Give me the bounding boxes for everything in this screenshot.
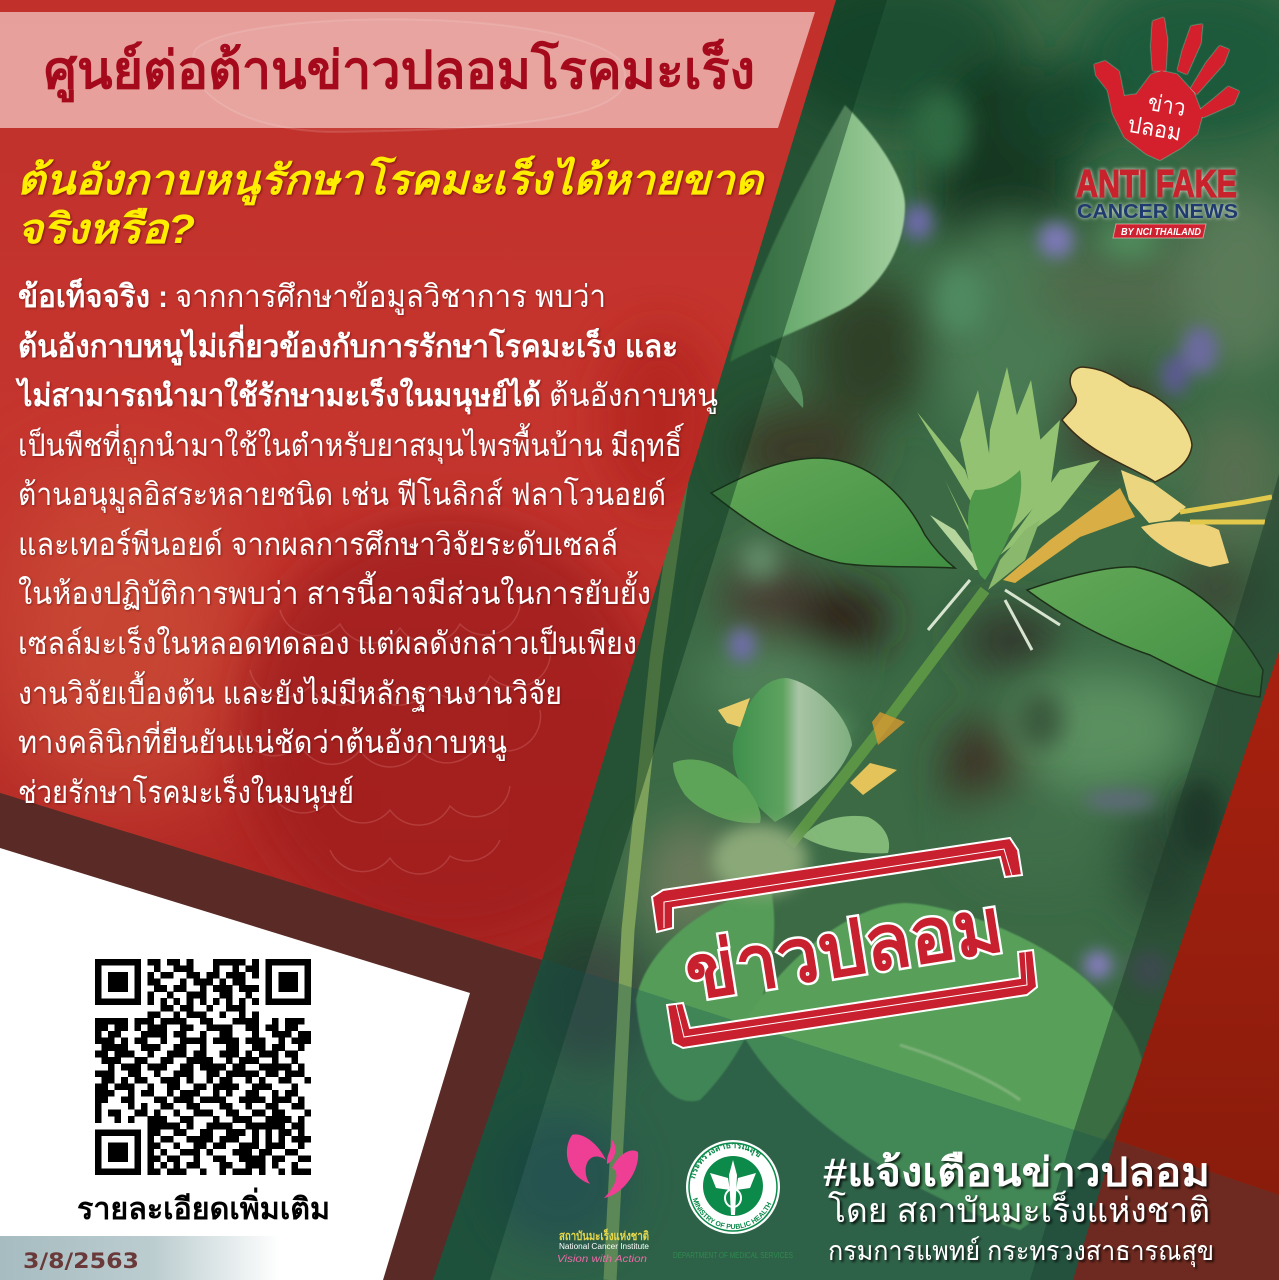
body text: ทางคลินิกที่ยืนยันแน่ชัดว่าต้นอังกาบหนู xyxy=(18,721,507,761)
date strip: 3/8/2563 xyxy=(23,1249,139,1273)
banner title: ศูนย์ต่อต้านข่าวปลอมโรคมะเร็ง xyxy=(44,39,755,103)
logo: anti fake cancer news xyxy=(1076,18,1238,238)
green bracts xyxy=(917,367,1100,590)
upper leaf xyxy=(730,105,905,362)
lower leaf cluster xyxy=(733,678,852,822)
body text: ไม่สามารถนำมาใช้รักษามะเร็งในมนุษย์ได้ xyxy=(15,376,541,415)
photo: angkab nu plant xyxy=(610,105,1272,1280)
heading: yellow question: ต้นอังกาบหนูรักษาโรคมะเร็งได้หายขาด xyxy=(17,155,766,206)
logo: national cancer institute xyxy=(557,1134,650,1265)
stamp top bracket xyxy=(652,838,1022,932)
heading: yellow question xyxy=(17,155,766,252)
body text: เป็นพืชที่ถูกนำมาใช้ในตำหรับยาสมุนไพรพื้นบ้าน มีฤทธิ์ xyxy=(18,422,685,465)
right red panel lower wedge xyxy=(1117,652,1279,1195)
yellow buds xyxy=(718,698,750,727)
anti fake text: ANTI FAKE xyxy=(1076,163,1237,206)
photo background: blurred foliage xyxy=(400,0,1279,1280)
by nci thailand tag: BY NCI THAILAND xyxy=(1121,227,1201,238)
fake news stamp xyxy=(652,838,1037,1048)
heading: yellow question: จริงหรือ? xyxy=(17,206,195,252)
left main leaf xyxy=(711,458,955,568)
hand text: ข่าว xyxy=(1146,89,1188,121)
body text: ข้อเท็จจริง : xyxy=(18,277,168,314)
red hand icon xyxy=(1095,18,1238,159)
big lower leaves xyxy=(636,885,1142,1230)
body text: ช่วยรักษาโรคมะเร็งในมนุษย์ xyxy=(18,774,354,812)
footer campaign text: #แจ้งเตือนข่าวปลอม xyxy=(823,1151,1210,1195)
long vertical stem xyxy=(610,480,682,1280)
right brown panel xyxy=(1073,1140,1279,1280)
body text: และเทอร์พีนอยด์ จากผลการศึกษาวิจัยระดับเซลล์ xyxy=(18,527,618,562)
hand text xyxy=(1126,86,1188,146)
logo: ministry of public health: กระทรวงสาธารณสุข xyxy=(690,1144,761,1178)
QR caption: รายละเอียดเพิ่มเติม xyxy=(77,1187,330,1226)
footer campaign text: กรมการแพทย์ กระทรวงสาธารณสุข xyxy=(828,1235,1214,1268)
footer campaign text xyxy=(823,1151,1214,1268)
flower petals xyxy=(1062,367,1229,567)
right main leaf xyxy=(1027,567,1263,697)
translucent band: right dark strip xyxy=(1030,474,1279,1280)
small upper leaflet xyxy=(770,355,803,408)
white QR panel xyxy=(0,848,470,1280)
stamp bottom bracket xyxy=(667,950,1037,1048)
body text: ต้นอังกาบหนูไม่เกี่ยวข้องกับการรักษาโรคมะเร็ง และ xyxy=(18,324,678,366)
logo: ministry of public health: MINISTRY OF PUBLIC HEALTH xyxy=(692,1198,772,1230)
vision tagline: Vision with Action xyxy=(557,1254,647,1265)
body text xyxy=(15,277,718,812)
translucent overlay: bottom teal xyxy=(433,958,1115,1280)
body text: เซลล์มะเร็งในหลอดทดลอง แต่ผลดังกล่าวเป็นเพียง xyxy=(18,625,637,661)
flower tube xyxy=(1003,488,1135,583)
logo: ministry of public health xyxy=(673,1140,793,1260)
seal text xyxy=(694,1148,772,1187)
hand text: ปลอม xyxy=(1126,111,1183,146)
institute name english: National Cancer Institute xyxy=(559,1242,650,1251)
pink butterfly icon xyxy=(567,1134,638,1198)
white thorns xyxy=(928,580,1060,650)
date strip xyxy=(0,1236,280,1280)
caduceus icon xyxy=(710,1160,756,1215)
cancer news text: CANCER NEWS xyxy=(1077,201,1238,223)
right red panel xyxy=(1115,652,1279,1195)
body text: จากการศึกษาข้อมูลวิชาการ พบว่า xyxy=(175,279,606,315)
stamp text: ข่าวปลอม xyxy=(679,883,1009,1017)
body text: ต้านอนุมูลอิสระหลายชนิด เช่น ฟีโนลิกส์ ฟลาโวนอยด์ xyxy=(18,477,666,514)
red text panel xyxy=(0,0,836,960)
translucent band: left dark strip xyxy=(433,0,887,1280)
body text: ต้นอังกาบหนู xyxy=(549,378,718,414)
footer campaign text: โดย สถาบันมะเร็งแห่งชาติ xyxy=(828,1190,1210,1230)
body text: งานวิจัยเบื้องต้น และยังไม่มีหลักฐานงานวิจัย xyxy=(18,671,562,712)
lower bud cluster xyxy=(712,824,808,896)
department caption: DEPARTMENT OF MEDICAL SERVICES xyxy=(673,1251,793,1260)
panel texture: cell xyxy=(0,330,720,940)
QR code xyxy=(95,959,311,1175)
dark brown band above white panel xyxy=(0,793,542,1280)
banner xyxy=(0,12,815,132)
main flower stem xyxy=(790,590,985,845)
institute name thai: สถาบันมะเร็งแห่งชาติ xyxy=(559,1228,649,1243)
stamens xyxy=(1180,497,1272,522)
body text: ในห้องปฏิบัติการพบว่า สารนี้อาจมีส่วนในการยับยั้ง xyxy=(18,571,651,611)
